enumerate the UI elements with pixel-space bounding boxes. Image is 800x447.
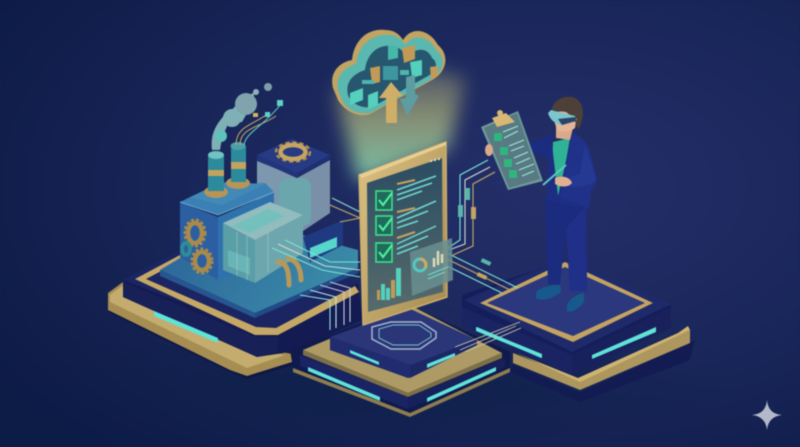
arm xyxy=(568,145,596,187)
checklist text lines xyxy=(397,176,436,254)
gold ring xyxy=(135,255,359,335)
hair xyxy=(552,97,583,130)
clipboard xyxy=(481,110,543,190)
gold pipes xyxy=(278,259,301,285)
bar chart xyxy=(377,268,401,300)
neck and face xyxy=(556,122,574,140)
panel: middle platform xyxy=(290,305,510,417)
icon: sparkle watermark xyxy=(752,400,782,430)
shirt xyxy=(551,138,570,197)
small control box xyxy=(303,220,343,262)
light beam xyxy=(335,60,466,182)
glass cube xyxy=(223,202,303,283)
panel: left platform xyxy=(108,235,362,379)
light bar xyxy=(154,311,218,343)
panel: right platform xyxy=(462,258,695,402)
upload arrow xyxy=(379,82,403,123)
blue slab xyxy=(160,235,358,313)
cloud data blocks xyxy=(350,45,438,109)
visor xyxy=(548,110,577,125)
jacket xyxy=(546,133,592,210)
figure: person with VR glasses xyxy=(481,97,597,312)
chimneys xyxy=(204,142,250,198)
icon: cloud xyxy=(332,30,445,123)
floating mini dashboard xyxy=(410,238,453,296)
back glass tank xyxy=(257,139,330,235)
window dots xyxy=(430,158,440,162)
smoke xyxy=(212,83,272,150)
light bar over connection xyxy=(477,327,541,358)
circuit prongs on middle slab xyxy=(455,322,521,352)
light bars xyxy=(308,367,380,401)
floor shadow xyxy=(60,323,740,447)
icon: gear xyxy=(276,142,310,162)
panel: factory xyxy=(180,83,343,285)
main block xyxy=(180,182,274,280)
checklist xyxy=(376,191,392,262)
data wires from chimney xyxy=(236,100,283,145)
hand with pen xyxy=(555,177,572,186)
icon: octagon xyxy=(372,322,436,349)
download arrow xyxy=(400,75,419,116)
top slab xyxy=(330,308,477,378)
panel: tablet xyxy=(359,142,453,325)
gears xyxy=(182,220,212,273)
legs xyxy=(545,200,587,291)
circuit lines: factory to tablet xyxy=(272,198,360,330)
circuit lines: tablet to clipboard xyxy=(445,160,518,293)
shoes xyxy=(536,284,561,300)
